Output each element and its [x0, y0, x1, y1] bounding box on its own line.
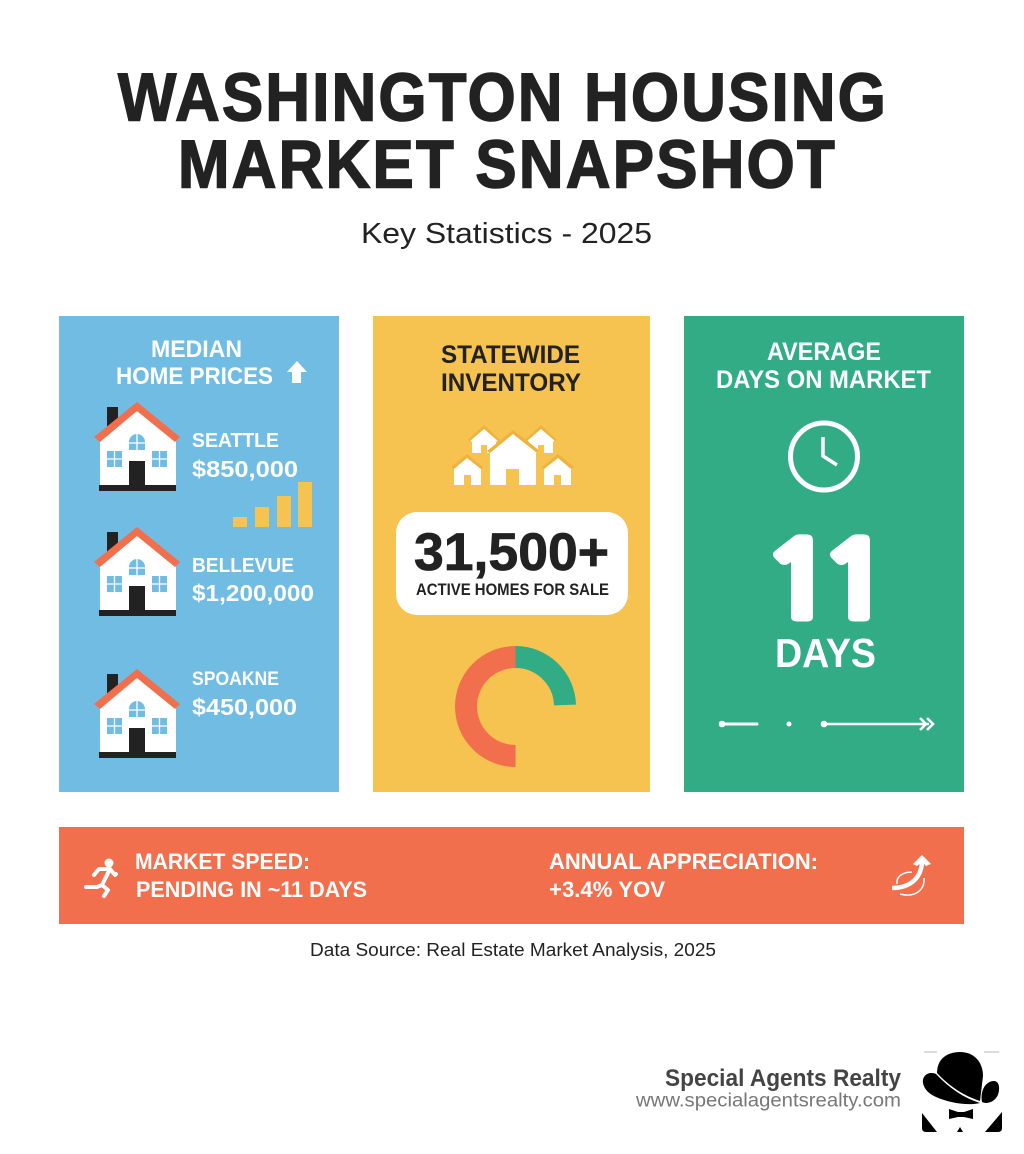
Bellevue price: BELLEVUE: [192, 555, 294, 577]
annual appreciation text: +3.4% YOV: [549, 877, 665, 902]
heading: median home prices: [116, 336, 273, 390]
icon: logo with bowler hat and bow tie: [922, 1052, 1002, 1132]
footer: company name and website: Special Agents Realty: [665, 1065, 902, 1092]
heading: average days on market: AVERAGE: [767, 338, 881, 366]
icon: neighbourhood houses: [451, 425, 574, 485]
icon: Seattle house: [94, 402, 180, 491]
bar chart: rising prices: [233, 482, 312, 527]
Spokane price: [192, 669, 297, 720]
arrow: timeline: [719, 718, 933, 730]
market speed text: PENDING IN ~11 DAYS: [136, 877, 367, 902]
big number: 11 days: 11: [761, 530, 894, 634]
callout: active homes: 31,500+: [414, 523, 609, 582]
callout: active homes: ACTIVE HOMES FOR SALE: [416, 580, 609, 599]
panel: median home prices: [59, 316, 339, 792]
Seattle price: $850,000: [192, 456, 298, 482]
Bellevue price: [192, 555, 314, 606]
footer: company name and website: www.specialagentsrealty.com: [635, 1090, 901, 1112]
heading: average days on market: [716, 338, 931, 394]
panel: average days on market: [684, 316, 964, 792]
icon: up arrow: [287, 361, 307, 383]
Seattle price: SEATTLE: [192, 430, 279, 452]
annual appreciation text: ANNUAL APPRECIATION:: [549, 849, 818, 874]
heading: statewide inventory: [441, 341, 581, 397]
heading: statewide inventory: INVENTORY: [441, 369, 581, 397]
icon: Spokane house: [94, 669, 180, 758]
donut chart: [466, 657, 565, 756]
icon: Bellevue house: [94, 527, 180, 616]
panel: statewide inventory: [373, 316, 650, 792]
market speed text: [135, 849, 367, 902]
heading: median home prices: MEDIAN: [151, 336, 242, 363]
Bellevue price: $1,200,000: [192, 580, 314, 606]
callout: active homes: [396, 512, 628, 615]
heading: average days on market: DAYS ON MARKET: [716, 366, 931, 394]
data source note: Data Source: Real Estate Market Analysis, 2025: [310, 940, 716, 960]
annual appreciation text: [549, 849, 818, 902]
icon: appreciation arrow: [892, 855, 931, 895]
panel: bottom stats band: [59, 827, 964, 924]
icon: runner: [86, 858, 116, 896]
Spokane price: $450,000: [192, 694, 297, 720]
footer: company name and website: [635, 1065, 902, 1112]
icon: clock: [790, 423, 858, 490]
market speed text: MARKET SPEED:: [135, 849, 310, 874]
title: MARKET SNAPSHOT: [178, 126, 837, 202]
big number: 11 days: DAYS: [775, 630, 876, 676]
Seattle price: [192, 430, 298, 482]
title: [118, 60, 888, 202]
heading: statewide inventory: STATEWIDE: [441, 341, 580, 369]
subtitle: Key Statistics - 2025: [361, 218, 652, 250]
title: WASHINGTON HOUSING: [118, 60, 888, 136]
heading: median home prices: HOME PRICES: [116, 363, 273, 390]
Spokane price: SPOAKNE: [192, 669, 279, 690]
